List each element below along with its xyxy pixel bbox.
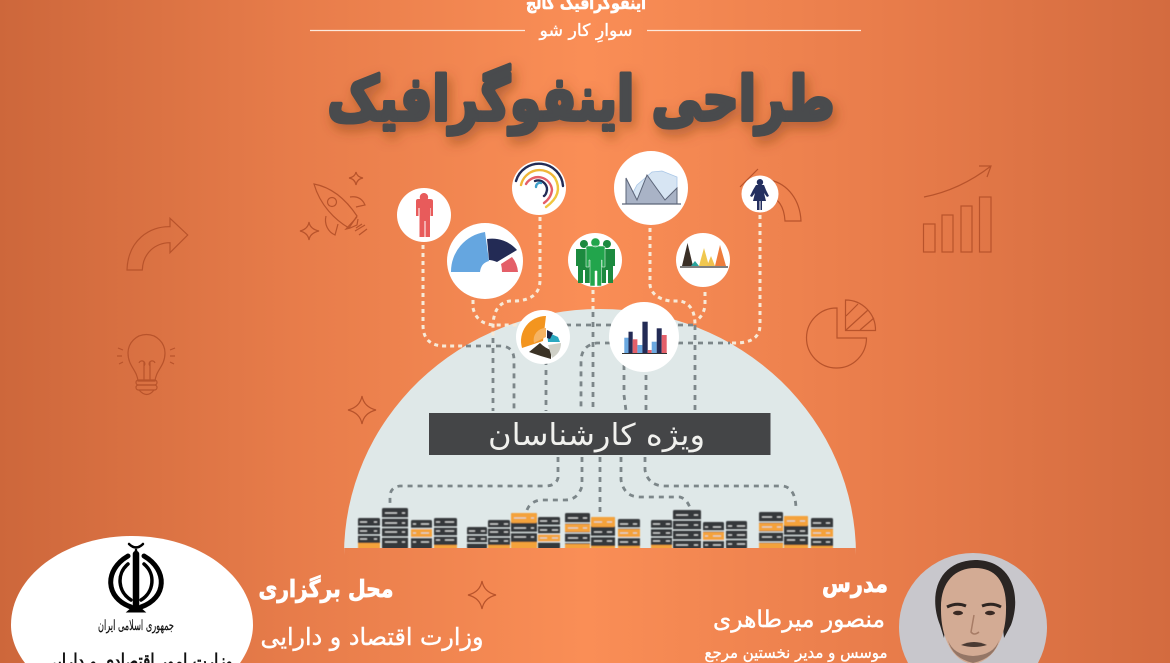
icon: sunburst chart — [516, 310, 570, 364]
icon: woman — [742, 176, 778, 212]
logo caption: جمهوری اسلامی ایران — [98, 618, 174, 634]
icon: curved arrow behind woman — [740, 169, 801, 221]
venue name: وزارت اقتصاد و دارایی — [260, 623, 484, 651]
icon: team — [568, 233, 622, 287]
venue heading: محل برگزاری — [258, 575, 394, 603]
title: طراحی اینفوگرافیک — [328, 64, 834, 135]
icon: man — [397, 188, 451, 242]
icon: area chart — [614, 151, 688, 225]
icon: sparkle bottom — [468, 581, 496, 609]
banner — [429, 413, 770, 455]
icon: bar chart — [609, 302, 679, 372]
server towers — [358, 508, 833, 549]
server group 2 — [467, 513, 560, 549]
instructor bio: موسس و مدیر نخستین مرجع — [704, 643, 888, 663]
instructor heading: مدرس — [822, 570, 888, 598]
icon: semi-circular chart — [447, 223, 523, 299]
icon: curved arrow — [127, 218, 188, 270]
icon: pie chart — [807, 300, 876, 368]
icon: radial arcs — [512, 161, 566, 215]
instructor photo — [899, 553, 1047, 663]
connectors: white dashed — [423, 215, 760, 346]
tagline with rules: سوارِ کار شو — [538, 21, 632, 43]
server group 4 — [651, 510, 747, 549]
banner: ویژه کارشناسان — [488, 418, 705, 453]
logo oval — [11, 536, 253, 663]
icon: rocket — [300, 172, 367, 240]
server group 5 — [759, 512, 833, 549]
icon: sparkle left of dome — [348, 396, 376, 424]
connectors: gray dashed — [390, 312, 796, 515]
icon: national emblem — [111, 544, 161, 612]
instructor name: منصور میرطاهری — [713, 607, 885, 633]
server group 3 — [565, 513, 640, 549]
icon: growth bars — [924, 166, 991, 252]
icon: peaks chart — [676, 233, 730, 287]
dome — [344, 309, 856, 555]
icon: light bulb — [117, 334, 175, 394]
server group 1 — [358, 508, 457, 549]
